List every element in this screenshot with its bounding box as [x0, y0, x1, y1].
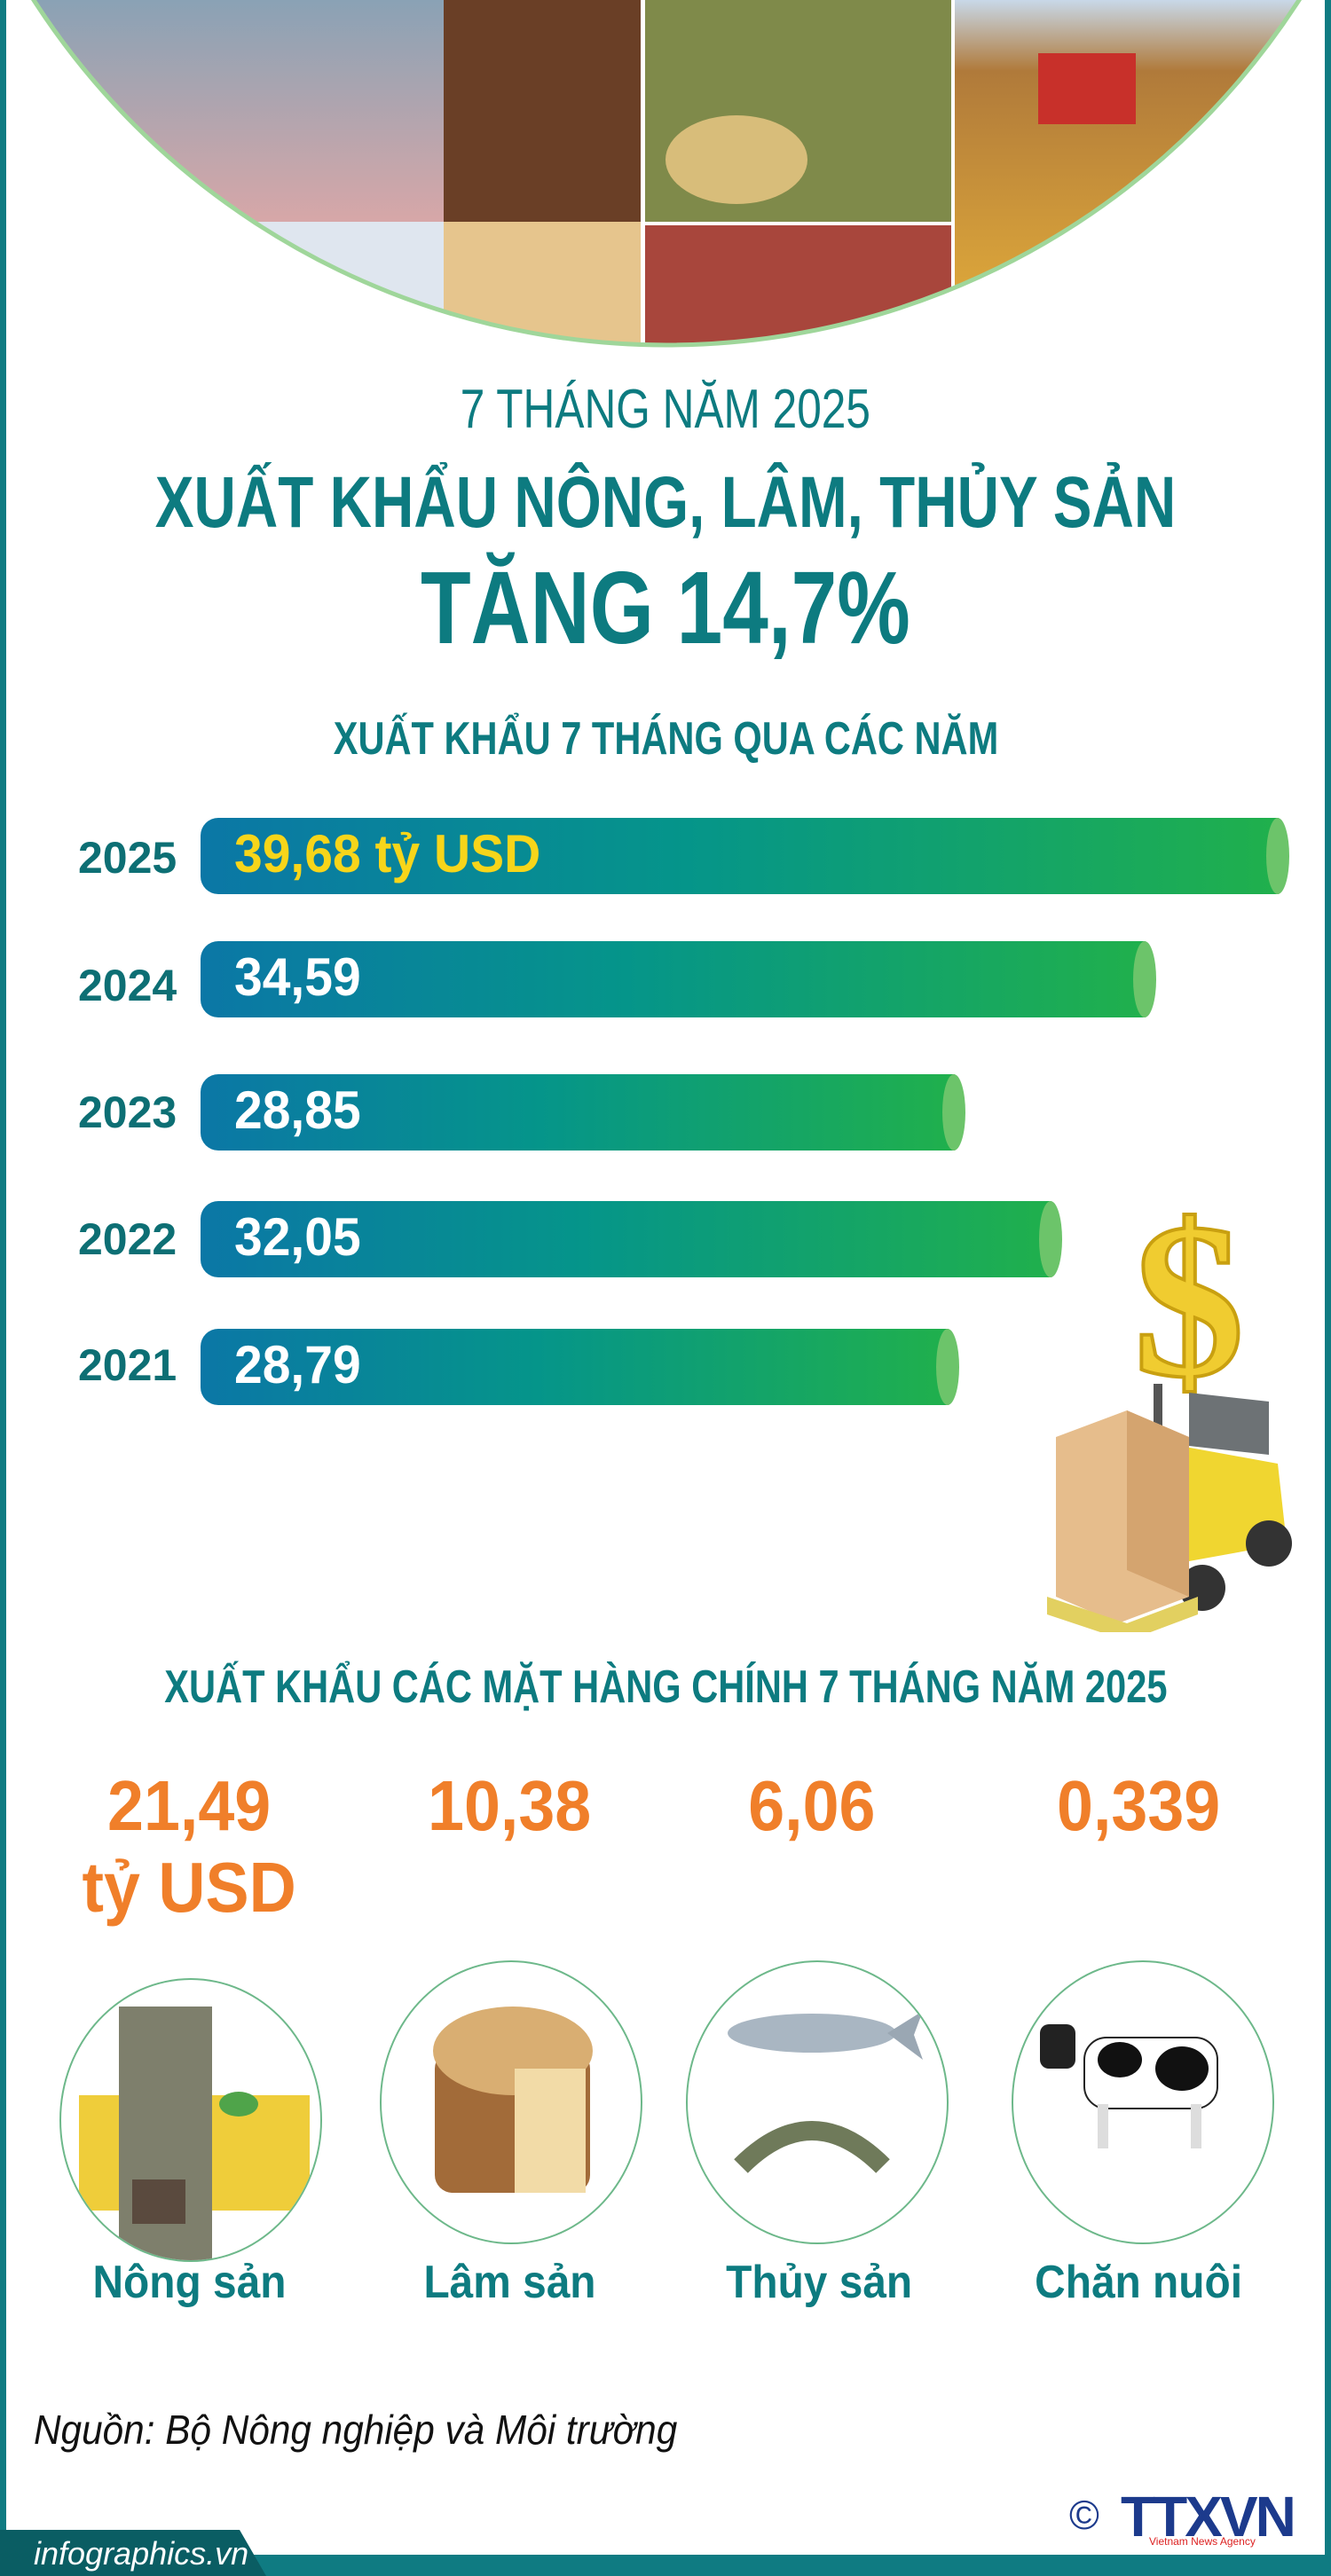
logo: TTXVN: Vietnam News Agency — [1149, 2535, 1256, 2548]
heading: bar chart: XUẤT KHẨU 7 THÁNG QUA CÁC NĂM — [333, 713, 998, 765]
product icons — [59, 1960, 1274, 2262]
bar chart: 2024 — [78, 961, 177, 1010]
bar chart: 2021 — [78, 1340, 177, 1390]
icon: rubber tree — [59, 1978, 322, 2262]
bar chart: 32,05 — [234, 1207, 361, 1267]
product labels — [92, 2257, 1242, 2308]
product labels: Chăn nuôi — [1035, 2257, 1242, 2308]
title: 7 tháng năm 2025: 7 THÁNG NĂM 2025 — [461, 379, 870, 440]
footer bar — [0, 2530, 1325, 2576]
product values: tỷ USD — [82, 1848, 296, 1927]
product labels: Thủy sản — [726, 2257, 912, 2308]
source: Nguồn: Bộ Nông nghiệp và Môi trường — [34, 2407, 677, 2453]
bar chart: 2023 — [78, 1088, 177, 1137]
bar chart — [78, 818, 1289, 1405]
title: growth: TĂNG 14,7% — [421, 550, 910, 665]
bar chart: 2022 — [78, 1214, 177, 1264]
product values: 10,38 — [428, 1766, 591, 1845]
icon: forklift with dollar — [1047, 1178, 1292, 1632]
footer text: infographics.vn — [34, 2535, 248, 2572]
photo collage semicircle — [31, 0, 1302, 348]
product values: 6,06 — [748, 1766, 876, 1845]
bar chart: 28,85 — [234, 1080, 361, 1140]
product values: 0,339 — [1057, 1766, 1220, 1845]
bar chart: 2025 — [78, 833, 177, 883]
heading: main products: XUẤT KHẨU CÁC MẶT HÀNG CHÍNH 7 THÁNG NĂM 2025 — [164, 1661, 1167, 1713]
bar chart: 39,68 tỷ USD — [234, 824, 540, 884]
icon: wood — [380, 1960, 642, 2244]
product values: 21,49 — [107, 1766, 271, 1845]
product values — [82, 1766, 1220, 1927]
icon: forklift with dollar: $ — [1134, 1178, 1244, 1424]
bar chart: 34,59 — [234, 947, 361, 1007]
title: main: XUẤT KHẨU NÔNG, LÂM, THỦY SẢN — [155, 462, 1176, 543]
icon: cow — [1012, 1960, 1274, 2244]
product labels: Nông sản — [92, 2257, 286, 2308]
bar chart: 28,79 — [234, 1335, 361, 1394]
icon: fish and shrimp — [686, 1960, 949, 2244]
logo: TTXVN: TTXVN — [1121, 2485, 1294, 2549]
product labels: Lâm sản — [423, 2257, 595, 2308]
logo: TTXVN: © — [1069, 2492, 1099, 2538]
